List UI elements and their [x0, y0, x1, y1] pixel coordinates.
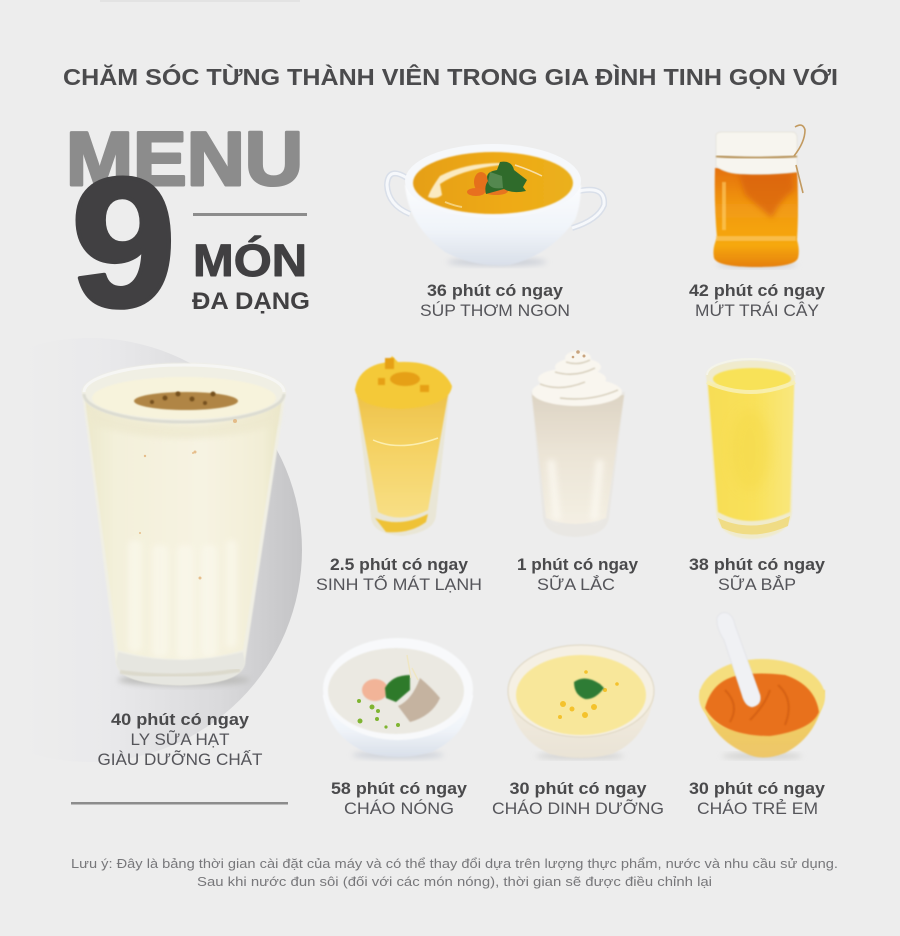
time label: 42 phút có ngay	[689, 281, 826, 300]
image: milkshake	[531, 350, 625, 537]
image: hot porridge bowl	[323, 638, 473, 759]
footnote line two: Sau khi nước đun sôi (đối với các món nóng), thời gian sẽ được điều chỉnh lại	[197, 874, 712, 889]
time label: 2.5 phút có ngay	[330, 555, 469, 574]
image: soup bowl	[387, 144, 604, 266]
footnote line one: Lưu ý: Đây là bảng thời gian cài đặt của máy và có thể thay đổi dựa trên lượng thực phẩm, nước và nhu cầu sử dụng.	[71, 856, 838, 871]
time label: 1 phút có ngay	[517, 555, 639, 574]
caption: cháo trẻ em	[689, 779, 826, 818]
heading word: MENU: MENU	[66, 117, 303, 202]
caption: cháo nóng	[331, 779, 468, 818]
name line one: LY SỮA HẠT	[130, 730, 230, 749]
time label: 38 phút có ngay	[689, 555, 826, 574]
dish name: SỮA LẮC	[537, 575, 615, 594]
caption: ly sữa hạt	[98, 710, 262, 769]
image: large nut milk glass	[82, 363, 286, 686]
top edge strip	[100, 0, 300, 2]
left column rule	[71, 802, 288, 804]
caption: cháo dinh dưỡng	[492, 779, 664, 818]
image: fruit jam jar	[713, 125, 805, 268]
dish name: CHÁO TRẺ EM	[697, 799, 818, 818]
dish name: CHÁO DINH DƯỠNG	[492, 799, 664, 818]
time label: 58 phút có ngay	[331, 779, 468, 798]
image: baby porridge bowl with spoon	[699, 613, 825, 759]
image: nutritious corn porridge bowl	[508, 645, 654, 759]
caption: sữa bắp	[689, 555, 826, 594]
heading: menu 9 món đa dạng	[66, 117, 310, 345]
time label: 30 phút có ngay	[689, 779, 826, 798]
dish name: CHÁO NÓNG	[344, 799, 454, 818]
dish name: MỨT TRÁI CÂY	[695, 301, 819, 320]
caption: mứt trái cây	[689, 281, 826, 320]
grey arc backdrop	[0, 338, 302, 762]
image: mango smoothie	[355, 356, 452, 536]
dish name: SỮA BẮP	[718, 575, 796, 594]
time label: 40 phút có ngay	[111, 710, 250, 729]
title: CHĂM SÓC TỪNG THÀNH VIÊN TRONG GIA ĐÌNH TINH GỌN VỚI	[63, 63, 838, 90]
caption: sữa lắc	[517, 555, 639, 594]
caption: súp thơm ngon	[420, 281, 570, 320]
time label: 30 phút có ngay	[510, 779, 647, 798]
image: corn milk glass	[706, 359, 795, 539]
dish name: SINH TỐ MÁT LẠNH	[316, 574, 482, 594]
footnote	[71, 856, 838, 889]
dish name: SÚP THƠM NGON	[420, 301, 570, 320]
name line two: GIÀU DƯỠNG CHẤT	[98, 750, 262, 769]
big number 9: 9	[71, 139, 176, 345]
heading words: ĐA DẠNG: ĐA DẠNG	[192, 288, 310, 315]
heading rule	[193, 213, 307, 216]
caption: sinh tố mát lạnh	[316, 555, 482, 594]
time label: 36 phút có ngay	[427, 281, 564, 300]
heading word: MÓN: MÓN	[193, 235, 307, 286]
